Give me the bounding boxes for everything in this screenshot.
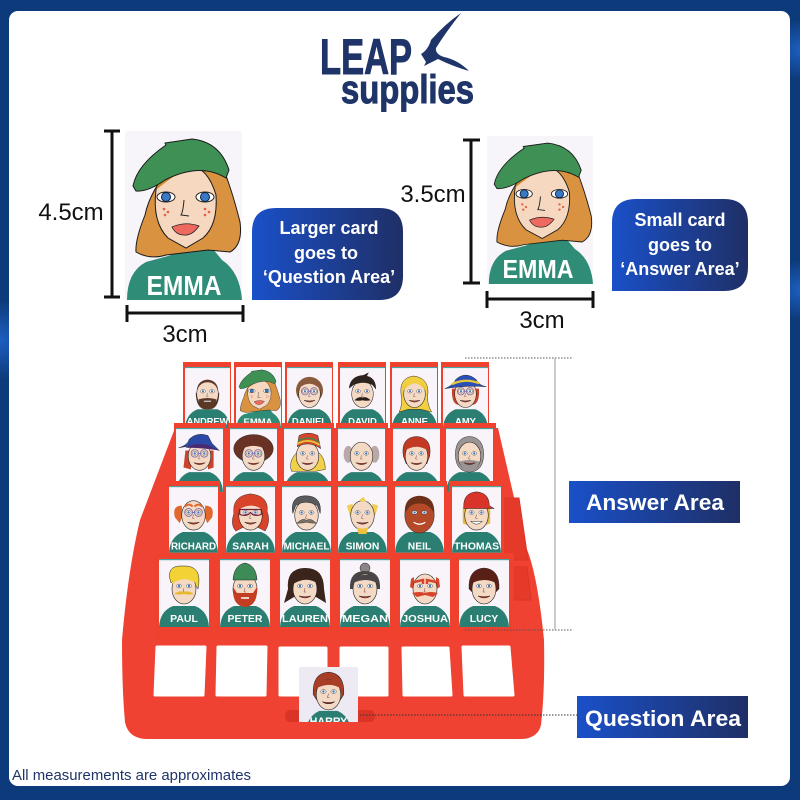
- card: Andrew: ANDREW: [187, 417, 228, 428]
- card: Lauren: LAUREN: [282, 613, 328, 625]
- card: Sarah: [223, 481, 277, 555]
- footnote: All measurements are approximates: [12, 768, 251, 784]
- card: Lucy: LUCY: [470, 613, 498, 625]
- card: Thomas: THOMAS: [454, 542, 499, 553]
- row 3 cards: [166, 481, 503, 555]
- card: Simon: [335, 481, 390, 555]
- card: Peter: [215, 553, 275, 640]
- card: Andrew: [183, 362, 231, 428]
- small card height dimension: [400, 140, 480, 283]
- card: Joshua: JOSHUA: [402, 613, 448, 625]
- card: Megan: MEGAN: [342, 613, 388, 625]
- card: Sarah: SARAH: [232, 542, 269, 553]
- card: Daniel: DANIEL: [292, 417, 327, 428]
- card: David: DAVID: [348, 417, 377, 428]
- card: Amy: [441, 362, 489, 428]
- card: Harry: HARRY: [310, 716, 347, 728]
- card: bald with grey sides: [336, 423, 388, 492]
- card: Paul: [155, 553, 215, 640]
- card: Paul: PAUL: [170, 613, 198, 625]
- callout: larger card: goes to: [294, 243, 358, 263]
- large card height dimension: [38, 131, 120, 297]
- card: Neil: [392, 481, 447, 555]
- large card height dimension: 4.5cm: [38, 199, 104, 226]
- side rib: [505, 498, 531, 600]
- card: Richard: [166, 481, 220, 555]
- large card width dimension: 3cm: [162, 321, 208, 348]
- card: Thomas: [449, 481, 503, 555]
- callout: larger card: ‘Question Area’: [263, 267, 395, 287]
- card: Amy: AMY: [455, 417, 477, 428]
- card: Michael: [279, 481, 333, 555]
- card: grey beard: [444, 423, 496, 492]
- callout: larger card: Larger card: [279, 218, 379, 238]
- game board: [122, 362, 544, 739]
- small card: Emma: [487, 136, 593, 284]
- large card: Emma: EMMA: [146, 270, 222, 301]
- card: Lauren: [275, 553, 335, 640]
- card: Anne: ANNE: [401, 417, 428, 428]
- card: Peter: PETER: [227, 613, 263, 625]
- small card width dimension: 3cm: [519, 307, 565, 334]
- label: question area: [577, 696, 748, 738]
- card: striped hat: [282, 423, 334, 492]
- label: answer area: [569, 481, 740, 523]
- card: Joshua: [395, 553, 455, 640]
- row 4 cards: [155, 553, 514, 640]
- board base: [122, 428, 544, 739]
- answer windows: [155, 647, 513, 695]
- card slot: [285, 710, 375, 722]
- logo: [320, 13, 474, 112]
- logo: LEAP: [320, 29, 412, 85]
- logo: supplies: [341, 68, 474, 112]
- card: Emma: [234, 362, 282, 428]
- card: curly hair: [228, 423, 280, 492]
- card: Richard: RICHARD: [171, 542, 216, 553]
- card: Michael: MICHAEL: [283, 542, 330, 553]
- row 2 cards: [174, 423, 496, 492]
- card: Neil: NEIL: [408, 542, 431, 553]
- card: blue hat: [174, 423, 226, 492]
- card: Lucy: [454, 553, 514, 640]
- card: Emma: EMMA: [243, 417, 273, 428]
- card: David: [338, 362, 386, 428]
- callout: small card: goes to: [648, 235, 712, 255]
- card: Megan: [335, 553, 395, 640]
- callout: small card: ‘Answer Area’: [620, 259, 740, 279]
- answer area bracket lines: [465, 358, 573, 630]
- large card width dimension: [127, 305, 243, 348]
- large card: Emma: [125, 131, 242, 301]
- small card: Emma: EMMA: [502, 254, 574, 284]
- card: Daniel: [285, 362, 333, 428]
- small card width dimension: [487, 291, 593, 334]
- card: Anne: [390, 362, 438, 428]
- label: question area: Question Area: [585, 706, 741, 731]
- row 1 cards: [183, 362, 489, 428]
- card: Simon: SIMON: [346, 542, 379, 553]
- card: red hair: [391, 423, 443, 492]
- callout: small card: [612, 199, 748, 291]
- question area leader line: [360, 714, 577, 716]
- callout: small card: Small card: [634, 210, 726, 230]
- small card height dimension: 3.5cm: [400, 181, 466, 208]
- card: Harry: [299, 667, 358, 735]
- label: answer area: Answer Area: [586, 490, 724, 515]
- callout: larger card: [252, 208, 403, 300]
